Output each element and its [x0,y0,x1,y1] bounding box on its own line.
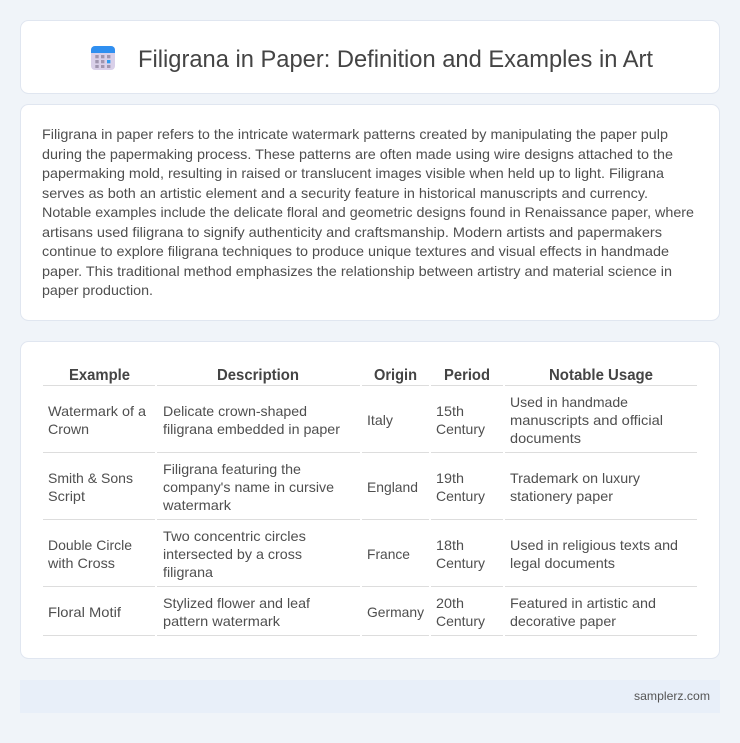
table row: Double Circle with Cross: Used in religious texts and [510,537,678,553]
table header row: Origin [374,367,417,384]
table row: Watermark of a Crown: Century [436,421,485,437]
text block: introduction paragraph: papermaking mold, resulting in raised or translucent images visible when held up to light. Filigrana [42,165,664,181]
table row: Floral Motif: Featured in artistic and [510,595,656,611]
table row: Watermark of a Crown: 15th [436,403,464,419]
table row: Floral Motif: Floral Motif [48,604,121,620]
panel: examples table [20,342,720,658]
table row: Floral Motif: Stylized flower and leaf [163,595,310,611]
text block: introduction paragraph: Notable examples include the delicate floral and geometric designs found in Renaissance paper, where [42,204,694,220]
table row: Smith & Sons Script: 19th [436,470,464,486]
text block: introduction paragraph: artisans used filigrana to signify authenticity and craftsmanship. Modern artists and papermakers [42,224,662,240]
table header row [43,367,697,386]
table row: Watermark of a Crown: documents [510,430,581,446]
table row: Watermark of a Crown: Delicate crown-shaped [163,403,307,419]
table row: Double Circle with Cross: France [367,546,410,562]
table row: Watermark of a Crown: Watermark of a [48,403,146,419]
table row: Double Circle with Cross: 18th [436,537,464,553]
table row: Floral Motif: decorative paper [510,613,616,629]
text block: introduction paragraph: during the papermaking process. These patterns are often made using wire designs attached to the [42,146,673,162]
table row: Smith & Sons Script: Script [48,488,85,504]
table row: Double Circle with Cross: Century [436,555,485,571]
table row: Smith & Sons Script: Filigrana featuring the [163,461,301,477]
table row: Smith & Sons Script: Smith & Sons [48,470,133,486]
table row: Floral Motif: 20th [436,595,464,611]
table row: Double Circle with Cross: filigrana [163,564,213,580]
table row: Smith & Sons Script: England [367,479,418,495]
table row: Watermark of a Crown: Crown [48,421,89,437]
text block: introduction paragraph [42,126,694,298]
table header row: Example [69,367,130,384]
icon: calendar [91,46,115,70]
table row: Double Circle with Cross: Two concentric circles [163,528,306,544]
title: Filigrana in Paper: Definition and Examples in Art [138,46,653,73]
table header row: Period [444,367,490,384]
text block: introduction paragraph: continue to explore filigrana techniques to produce unique textures and visual effects in handmade [42,243,669,259]
table row: Watermark of a Crown: Used in handmade [510,394,628,410]
table row: Double Circle with Cross: with Cross [47,555,115,571]
table row: Smith & Sons Script: watermark [162,497,232,513]
text block: introduction paragraph: serves as both an artistic element and a security feature in historical manuscripts and currency. [42,185,648,201]
panel: header [20,20,720,94]
footer [20,680,720,713]
table row: Smith & Sons Script: stationery paper [510,488,613,504]
table row: Watermark of a Crown [43,394,697,453]
table row: Smith & Sons Script: Trademark on luxury [510,470,640,486]
table header row: Notable Usage [549,367,653,384]
table row: Double Circle with Cross: Double Circle [48,537,132,553]
footer: samplerz.com [634,689,710,703]
table row: Double Circle with Cross: intersected by a cross [163,546,302,562]
table row: Floral Motif: Germany [367,604,424,620]
table row: Smith & Sons Script: company's name in cursive [163,479,334,495]
panel: introduction [20,104,720,320]
table row: Watermark of a Crown: Italy [367,412,393,428]
table row: Floral Motif: pattern watermark [163,613,281,629]
table row: Watermark of a Crown: filigrana embedded in paper [163,421,340,437]
table row: Smith & Sons Script: Century [436,488,485,504]
text block: introduction paragraph: paper production. [42,282,153,298]
table row: Floral Motif [43,595,697,636]
text block: introduction paragraph: Filigrana in paper refers to the intricate watermark patterns created by manipulating the paper pulp [42,126,668,142]
table row: Smith & Sons Script [43,461,697,520]
text block: introduction paragraph: paper. This traditional method emphasizes the relationship between artistry and material science in [42,263,672,279]
table header row: Description [217,367,299,384]
table row: Watermark of a Crown: manuscripts and official [510,412,663,428]
table row: Double Circle with Cross [43,528,697,587]
table row: Floral Motif: Century [436,613,485,629]
table row: Double Circle with Cross: legal documents [510,555,615,571]
